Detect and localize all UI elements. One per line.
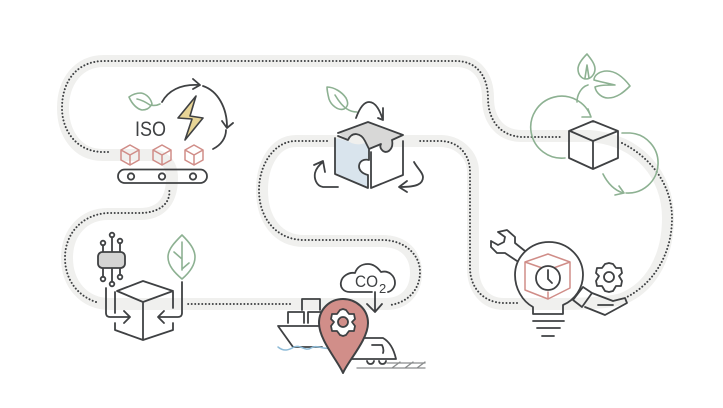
icon: location pin with gear xyxy=(319,299,368,373)
puzzle cube outlines xyxy=(335,122,403,188)
icon: inputs to cube group xyxy=(98,233,195,340)
icon: circular cube group xyxy=(531,54,658,195)
puzzle cube left face xyxy=(335,138,369,188)
icon: CO2 cloud xyxy=(341,264,395,312)
icon: two leaves xyxy=(577,54,630,102)
icon: large cube xyxy=(115,281,173,340)
icon: microchip xyxy=(98,233,125,286)
icon: train xyxy=(352,338,425,368)
icon: maintenance lightbulb group xyxy=(491,230,627,336)
puzzle cube top face xyxy=(338,122,403,152)
icon: ship xyxy=(278,299,330,350)
text: ISO: ISO xyxy=(135,118,166,141)
icon: lightning bolt xyxy=(178,96,203,140)
icon: gear xyxy=(596,263,622,292)
arrow: left green loop xyxy=(531,96,591,158)
icon: three red cubes xyxy=(121,145,203,165)
arrow: right curved arrow xyxy=(399,162,423,192)
icon: hand xyxy=(573,287,627,315)
icon: leaf xyxy=(129,93,160,110)
arrow: input arrow from leaf xyxy=(158,282,182,323)
icon: red cube in bulb xyxy=(525,254,570,299)
icon: leaf xyxy=(327,87,357,112)
text: CO2: CO xyxy=(355,272,378,291)
icon: upright leaf xyxy=(168,235,195,279)
arrow: input arrow from chip xyxy=(106,288,130,323)
dotted route line xyxy=(62,61,672,305)
icon: bulb xyxy=(515,242,583,336)
arrow: right green loop xyxy=(603,133,658,195)
icon: puzzle cube group xyxy=(314,87,423,192)
icon: transport and CO2 group xyxy=(278,264,425,373)
icon: clock xyxy=(536,266,560,290)
panel: puzzle cube faces xyxy=(335,122,403,188)
icon: wrench xyxy=(491,230,525,261)
arrow: left curved arrow xyxy=(314,161,338,187)
winding route band xyxy=(63,61,668,304)
icon: ISO conveyor group xyxy=(118,79,233,183)
text: subscript 2: 2 xyxy=(379,281,386,296)
arrow: top curved arrow xyxy=(356,102,383,120)
arrow: cycle arrows xyxy=(162,79,233,149)
icon: cube xyxy=(569,121,618,169)
icon: conveyor belt xyxy=(118,170,207,183)
